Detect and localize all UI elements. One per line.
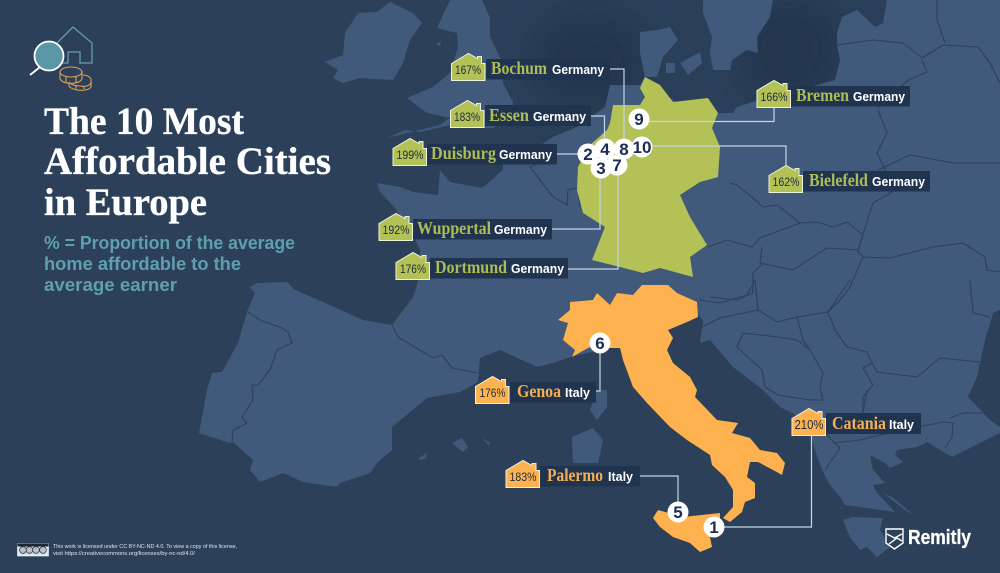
label: Genoa [476,376,596,404]
licence text: This work is licensed under CC BY-NC-ND 4.0. To view a copy of this license, [53,544,237,550]
label: Genoa: Italy [565,385,591,400]
label: Bielefeld: 162% [772,175,800,189]
label: Duisburg [393,138,557,166]
label: Bremen: 166% [760,90,788,104]
label: Duisburg: Germany [499,147,553,162]
logo: Remitly: Remitly [908,527,972,549]
map: Europe landmass [199,0,1000,557]
licence text: visit https://creativecommons.org/licenses/by-nc-nd/4.0/ [53,551,195,557]
map: country borders [232,0,1000,470]
logo: Remitly [886,527,972,549]
label: Bremen: Bremen [796,85,849,105]
rank markers: Germany: 4 [600,140,610,159]
subtitle: average earner [44,275,177,295]
label: Wuppertal: Germany [494,222,548,237]
label: Duisburg: Duisburg [431,143,496,163]
label: Dortmund: Germany [511,261,565,276]
rank markers: Germany: 9 [634,110,644,129]
label: Essen: Essen [489,105,529,125]
icon: house, magnifier and coins [30,27,92,90]
label: Bielefeld: Germany [872,174,926,189]
title: Affordable Cities [44,140,331,183]
title: in Europe [44,181,207,224]
label: Essen: 183% [454,110,480,124]
subtitle [44,233,295,295]
title [44,100,331,224]
label: Palermo: Palermo [547,465,603,485]
rank markers: Italy: 1 [709,518,719,537]
label: Bochum: 167% [455,63,481,77]
label: Dortmund [396,252,568,280]
rank markers: Italy [590,332,724,538]
label: Palermo: 183% [510,470,537,484]
licence badge [18,544,48,556]
label: Dortmund: 176% [400,262,426,276]
subtitle: % = Proportion of the average [44,233,295,253]
label: Bielefeld [769,166,930,192]
label: Genoa: Genoa [517,381,561,401]
label: Duisburg: 199% [396,148,424,162]
label: Catania: Catania [832,413,886,433]
label: Dortmund: Dortmund [435,257,507,277]
label: Bremen: Germany [853,89,906,104]
rank markers: Germany: 2 [583,145,593,164]
darker northern seas [530,0,845,110]
rank markers: Germany: 7 [612,156,622,175]
rank markers: Germany [578,108,652,178]
label: Bremen [757,80,910,108]
rank markers: Germany: 10 [633,138,651,157]
label: Wuppertal: Wuppertal [417,218,491,238]
rank markers: Germany: 8 [619,140,629,159]
label: Palermo [506,460,640,488]
label: Essen: Germany [533,109,587,124]
rank markers: Germany: 3 [596,159,606,178]
map: Germany [577,77,720,277]
label: Catania: 210% [794,417,824,432]
label: Bochum [452,54,610,80]
licence text [53,544,237,557]
label: Bochum: Germany [552,62,605,77]
label: Genoa: 176% [480,386,506,400]
title: The 10 Most [44,100,244,143]
label: Wuppertal [379,214,552,240]
rank markers: Italy: 5 [673,503,683,522]
label: Palermo: Italy [608,469,634,484]
label: Bielefeld: Bielefeld [809,170,868,190]
connector lines [552,69,812,527]
label: Catania: Italy [889,417,915,432]
subtitle: home affordable to the [44,254,241,274]
label: Bochum: Bochum [491,58,547,78]
label: Catania [792,408,921,436]
rank markers: Italy: 6 [595,334,605,353]
label: Wuppertal: 192% [382,223,410,237]
label: Essen [450,100,591,128]
map: Italy [558,285,785,552]
